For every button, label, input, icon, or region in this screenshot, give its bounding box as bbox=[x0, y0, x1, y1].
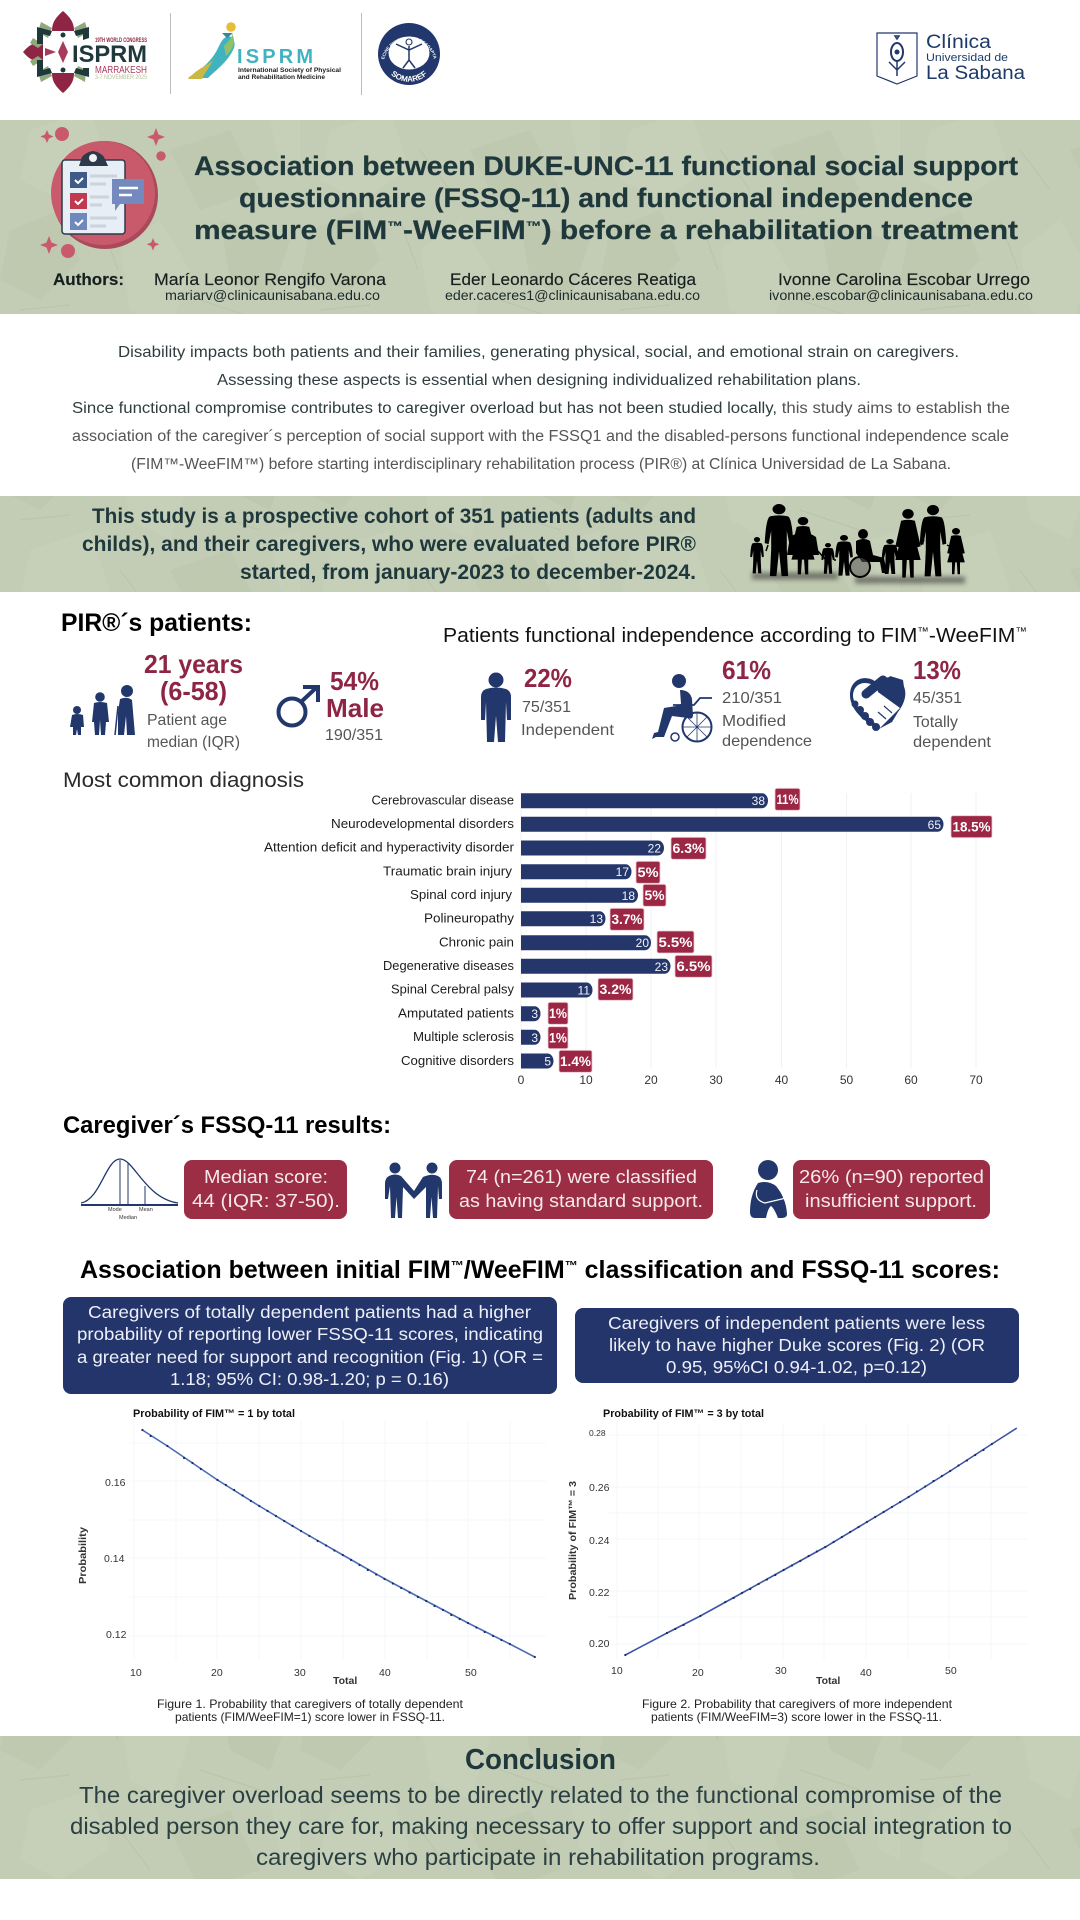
caption: figure 2: patients (FIM/WeeFIM=3) score lower in the FSSQ-11. bbox=[651, 1710, 942, 1724]
callout: totally dependent finding: 1.18; 95% CI: 0.98-1.20; p = 0.16) bbox=[170, 1369, 449, 1389]
axis labels: 0.22 bbox=[589, 1587, 610, 1599]
bar values: 3 bbox=[531, 1007, 538, 1021]
stat: modified dependence: 61% bbox=[722, 655, 771, 685]
stat: age: (6-58) bbox=[160, 676, 227, 706]
stat: modified dependence: dependence bbox=[722, 733, 812, 750]
text block: introduction: Since functional compromise contributes to caregiver overload but has not been studied locally, this study aims to establish the bbox=[72, 400, 1010, 417]
x axis ticks: 70 bbox=[969, 1073, 983, 1087]
callout: insufficient support: 26% (n=90) reported bbox=[799, 1166, 984, 1187]
study description: This study is a prospective cohort of 351 patients (adults and bbox=[92, 505, 696, 528]
text block: introduction: association of the caregiver´s perception of social support with the FSSQ1 and the disabled-persons functional independence scale bbox=[72, 428, 1009, 445]
bar values bbox=[531, 794, 941, 1068]
percentage badges: 6.5% bbox=[676, 959, 710, 974]
heading: association: /WeeFIM bbox=[464, 1256, 565, 1284]
chart title: Probability of FIM™ = 1 by total bbox=[133, 1408, 295, 1420]
callout: standard support: 74 (n=261) were classified bbox=[466, 1166, 697, 1187]
icon: handshake heart bbox=[850, 676, 905, 731]
percentage badges: 5.5% bbox=[658, 935, 692, 950]
callout: independent finding: Caregivers of independent patients were less bbox=[608, 1313, 985, 1333]
x axis ticks: 50 bbox=[840, 1073, 853, 1087]
axis labels: Total bbox=[333, 1675, 357, 1687]
category labels: Spinal cord injury bbox=[410, 888, 513, 902]
category labels: Degenerative diseases bbox=[383, 959, 514, 973]
icon: bell curve bbox=[81, 1159, 178, 1221]
axis labels: 30 bbox=[775, 1665, 787, 1677]
callout: independent finding: 0.95, 95%CI 0.94-1.02, p=0.12) bbox=[666, 1357, 927, 1377]
caption: figure 2 bbox=[642, 1697, 953, 1724]
category labels: Neurodevelopmental disorders bbox=[331, 817, 514, 831]
title: ) before a rehabilitation treatment bbox=[542, 215, 1018, 245]
axis labels: Probability of FIM™ = 3 bbox=[567, 1481, 579, 1600]
heading: association: Association between initial FIM bbox=[80, 1256, 451, 1284]
percentage badges: 5% bbox=[644, 888, 664, 903]
stat: modified dependence bbox=[652, 655, 812, 750]
icon: clipboard checklist bbox=[40, 127, 166, 258]
bar values: 3 bbox=[531, 1031, 538, 1045]
category labels: Polineuropathy bbox=[424, 912, 515, 926]
caption: figure 1: patients (FIM/WeeFIM=1) score lower in FSSQ-11. bbox=[175, 1710, 445, 1724]
data points bbox=[142, 1430, 535, 1657]
stat: age: median (IQR) bbox=[147, 734, 240, 751]
title: Association between DUKE-UNC-11 functional social support bbox=[194, 151, 1018, 181]
percentage badges: 1% bbox=[549, 1006, 567, 1021]
x axis ticks: 20 bbox=[644, 1073, 658, 1087]
data points bbox=[625, 1444, 992, 1655]
icon: bell curve: Median bbox=[119, 1215, 137, 1221]
bar values: 18 bbox=[622, 889, 635, 903]
authors: eder.caceres1@clinicaunisabana.edu.co bbox=[445, 288, 700, 303]
axis labels: 0.16 bbox=[105, 1477, 126, 1489]
icon: sitting person bbox=[750, 1160, 787, 1218]
icon: family silhouettes bbox=[750, 504, 965, 580]
chart title: Probability of FIM™ = 3 by total bbox=[603, 1408, 764, 1420]
caption: figure 1: Figure 1. Probability that caregivers of totally dependent bbox=[157, 1697, 464, 1711]
stat: totally dependent: 45/351 bbox=[913, 690, 962, 707]
data line bbox=[142, 1430, 535, 1657]
text block: introduction bbox=[72, 344, 1010, 473]
authors bbox=[53, 271, 1033, 303]
stat: independent bbox=[481, 663, 615, 742]
icon: standing person bbox=[481, 672, 511, 742]
stat: modified dependence: 210/351 bbox=[722, 690, 782, 707]
axis labels bbox=[77, 1477, 477, 1687]
x axis ticks: 0 bbox=[518, 1073, 525, 1087]
stat: totally dependent: 13% bbox=[913, 655, 961, 685]
callout: standard support bbox=[449, 1160, 713, 1219]
stat: male: 190/351 bbox=[325, 727, 383, 744]
heading: caregiver results: Caregiver´s FSSQ-11 results: bbox=[63, 1112, 391, 1139]
axis labels: 0.28 bbox=[589, 1428, 606, 1438]
logo: ISPRM society bbox=[188, 22, 341, 81]
heading: functional independence: Patients functional independence according to FIM bbox=[443, 625, 892, 647]
icon: male symbol bbox=[278, 687, 318, 726]
bar values: 13 bbox=[590, 912, 603, 926]
bar values: 38 bbox=[752, 794, 765, 808]
title: questionnaire (FSSQ-11) and functional independence bbox=[239, 183, 973, 213]
axis labels: Total bbox=[816, 1675, 840, 1687]
callout: independent finding bbox=[575, 1308, 1019, 1383]
panel: title band bbox=[0, 120, 1080, 314]
logo: SOMAREF bbox=[378, 23, 440, 85]
logo: Clinica Universidad de La Sabana: Universidad de bbox=[926, 52, 1008, 64]
logo: Clinica Universidad de La Sabana: La Sabana bbox=[926, 63, 1025, 84]
logo: ISPRM Marrakesh congress: MARRAKESH bbox=[95, 65, 147, 76]
bar values: 5 bbox=[544, 1054, 551, 1068]
authors: Authors: bbox=[53, 271, 124, 289]
x axis ticks: 60 bbox=[904, 1073, 918, 1087]
callout: totally dependent finding: probability of reporting lower FSSQ-11 scores, indicating bbox=[77, 1324, 543, 1344]
percentage badges: 5% bbox=[638, 865, 658, 880]
axis labels: 0.26 bbox=[589, 1482, 610, 1494]
bar values: 11 bbox=[578, 984, 590, 998]
stat: independent: 22% bbox=[524, 663, 572, 693]
line chart: figure 1 bbox=[77, 1408, 546, 1687]
panel: study design band bbox=[0, 496, 1080, 592]
conclusion text: The caregiver overload seems to be directly related to the functional compromise of the bbox=[79, 1782, 1002, 1808]
stat: totally dependent bbox=[850, 655, 992, 751]
stat: male bbox=[278, 666, 384, 744]
bar values: 65 bbox=[928, 818, 941, 832]
conclusion text: disabled person they care for, making necessary to offer support and social integration to bbox=[70, 1813, 1012, 1839]
data line bbox=[625, 1428, 1017, 1655]
logo: Clinica Universidad de La Sabana bbox=[877, 32, 1025, 84]
stat: totally dependent: dependent bbox=[913, 734, 992, 751]
logo: ISPRM Marrakesh congress: ISPRM bbox=[72, 41, 147, 68]
category labels bbox=[264, 794, 515, 1068]
bar values: 20 bbox=[636, 936, 649, 950]
percentage badges: 1% bbox=[549, 1030, 567, 1046]
callout: independent finding: likely to have higher Duke scores (Fig. 2) (OR bbox=[609, 1335, 985, 1355]
panel: conclusion bbox=[0, 1736, 1080, 1879]
authors: ivonne.escobar@clinicaunisabana.edu.co bbox=[769, 288, 1033, 303]
caption: figure 2: Figure 2. Probability that caregivers of more independent bbox=[642, 1697, 953, 1711]
stat: modified dependence: Modified bbox=[722, 713, 786, 730]
heading: association: ™ bbox=[565, 1258, 578, 1273]
study description bbox=[82, 505, 697, 584]
heading: functional independence: ™ bbox=[1015, 626, 1027, 638]
stat: male: 54% bbox=[330, 666, 379, 696]
text block: introduction: Disability impacts both patients and their families, generating physical, social, and emotional strain on caregivers. bbox=[118, 344, 959, 361]
axis labels: 0.20 bbox=[589, 1638, 610, 1650]
category labels: Cognitive disorders bbox=[401, 1054, 514, 1068]
conclusion text bbox=[70, 1782, 1012, 1870]
percentage badges: 3.7% bbox=[612, 912, 642, 927]
icon: three ages bbox=[70, 685, 135, 735]
logo: ISPRM society: ISPRM bbox=[237, 46, 313, 68]
axis labels: 0.12 bbox=[106, 1629, 127, 1641]
title: ™ bbox=[387, 218, 403, 234]
axis labels: 20 bbox=[692, 1667, 704, 1679]
study description: childs), and their caregivers, who were evaluated before PIR® bbox=[82, 533, 697, 556]
x axis ticks: 40 bbox=[775, 1073, 788, 1087]
axis labels: 50 bbox=[465, 1667, 477, 1679]
authors: María Leonor Rengifo Varona bbox=[154, 271, 387, 289]
bars bbox=[521, 793, 944, 1068]
stat: male: Male bbox=[326, 693, 384, 723]
x axis ticks: 30 bbox=[709, 1073, 723, 1087]
stat: age bbox=[70, 649, 243, 751]
line chart: figure 2 bbox=[567, 1408, 1028, 1687]
text block: introduction: (FIM™-WeeFIM™) before starting interdisciplinary rehabilitation process (PIR®) at Clínica Universidad de La Sabana. bbox=[131, 456, 951, 473]
logo: ISPRM Marrakesh congress: 19TH WORLD CONGRESS bbox=[95, 38, 147, 44]
authors: mariarv@clinicaunisabana.edu.co bbox=[165, 288, 380, 303]
callout: totally dependent finding bbox=[63, 1297, 557, 1394]
category labels: Attention deficit and hyperactivity disorder bbox=[264, 840, 514, 854]
axis labels bbox=[567, 1428, 957, 1687]
percentage badges: 6.3% bbox=[672, 841, 704, 856]
title bbox=[194, 151, 1018, 245]
callout: standard support: as having standard support. bbox=[459, 1190, 703, 1211]
callout: totally dependent finding: Caregivers of totally dependent patients had a higher bbox=[88, 1302, 531, 1322]
caption: figure 1 bbox=[157, 1697, 464, 1724]
icon: wheelchair user bbox=[652, 674, 712, 742]
category labels: Cerebrovascular disease bbox=[372, 794, 514, 808]
stat: totally dependent: Totally bbox=[913, 714, 958, 731]
study description: started, from january-2023 to december-2024. bbox=[240, 561, 696, 584]
logo: ISPRM society: International Society of Physical bbox=[238, 67, 341, 74]
heading: functional independence: -WeeFIM bbox=[929, 625, 1015, 647]
percentage badges: 3.2% bbox=[600, 982, 632, 997]
stat: age: 21 years bbox=[144, 649, 243, 679]
conclusion text: caregivers who participate in rehabilitation programs. bbox=[256, 1844, 820, 1870]
percentage badges: 1.4% bbox=[560, 1054, 591, 1069]
stat: independent: 75/351 bbox=[522, 699, 571, 716]
icon: bell curve: Mean bbox=[139, 1207, 153, 1213]
axis labels: 10 bbox=[611, 1665, 623, 1677]
heading: PIR patients: PIR®´s patients: bbox=[61, 609, 252, 637]
bar values: 23 bbox=[655, 960, 668, 974]
logo: ISPRM Marrakesh congress bbox=[23, 11, 148, 93]
heading: most common diagnosis: Most common diagnosis bbox=[63, 769, 304, 792]
authors: Ivonne Carolina Escobar Urrego bbox=[778, 271, 1030, 289]
icon: two people holding hands bbox=[385, 1162, 442, 1218]
category labels: Traumatic brain injury bbox=[383, 864, 513, 878]
heading: association: ™ bbox=[451, 1258, 464, 1273]
x axis ticks: 10 bbox=[579, 1073, 593, 1087]
authors: Eder Leonardo Cáceres Reatiga bbox=[450, 271, 697, 289]
heading: functional independence: ™ bbox=[917, 626, 929, 638]
icon: bell curve: Mode bbox=[108, 1207, 122, 1213]
axis labels: 50 bbox=[945, 1665, 957, 1677]
stat: independent: Independent bbox=[521, 722, 615, 739]
bar chart: diagnoses bbox=[264, 788, 992, 1087]
title: ™ bbox=[526, 218, 542, 234]
axis labels: 10 bbox=[130, 1667, 142, 1679]
callout: insufficient support bbox=[793, 1160, 990, 1219]
category labels: Chronic pain bbox=[439, 936, 514, 950]
percentage badges bbox=[548, 788, 992, 1072]
axis labels: 0.24 bbox=[589, 1535, 610, 1547]
axis labels: 30 bbox=[294, 1667, 306, 1679]
axis labels: 40 bbox=[860, 1667, 872, 1679]
logo: ISPRM society: and Rehabilitation Medicine bbox=[238, 74, 326, 81]
title: measure (FIM bbox=[194, 215, 365, 245]
percentage badges: 18.5% bbox=[952, 820, 990, 834]
logo: Clinica Universidad de La Sabana: Clínica bbox=[926, 32, 991, 53]
x axis ticks bbox=[518, 1073, 983, 1087]
callout: median score bbox=[184, 1160, 347, 1219]
title: -WeeFIM bbox=[403, 215, 526, 245]
percentage badges: 11% bbox=[776, 792, 798, 807]
bar values: 17 bbox=[616, 865, 629, 879]
conclusion heading: Conclusion bbox=[465, 1744, 616, 1776]
bar values: 22 bbox=[648, 842, 661, 856]
callout: totally dependent finding: a greater need for support and recognition (Fig. 1) (OR = bbox=[77, 1347, 543, 1367]
category labels: Spinal Cerebral palsy bbox=[391, 982, 515, 996]
axis labels: 20 bbox=[211, 1667, 223, 1679]
text block: introduction: Assessing these aspects is essential when designing individualized rehabilitation plans. bbox=[217, 372, 861, 389]
category labels: Multiple sclerosis bbox=[413, 1030, 514, 1044]
callout: median score: 44 (IQR: 37-50). bbox=[192, 1190, 340, 1211]
category labels: Amputated patients bbox=[398, 1006, 514, 1020]
heading: association: classification and FSSQ-11 scores: bbox=[578, 1256, 1000, 1284]
logo: ISPRM Marrakesh congress: 3-7 NOVEMBER 2025 bbox=[95, 75, 148, 81]
axis labels: Probability bbox=[77, 1527, 89, 1584]
stat: age: Patient age bbox=[147, 712, 227, 729]
callout: median score: Median score: bbox=[204, 1166, 328, 1187]
callout: insufficient support: insufficient support. bbox=[805, 1190, 977, 1211]
axis labels: 40 bbox=[379, 1667, 391, 1679]
logo: SOMAREF: SOMAREF bbox=[392, 70, 426, 82]
axis labels: 0.14 bbox=[104, 1553, 125, 1565]
